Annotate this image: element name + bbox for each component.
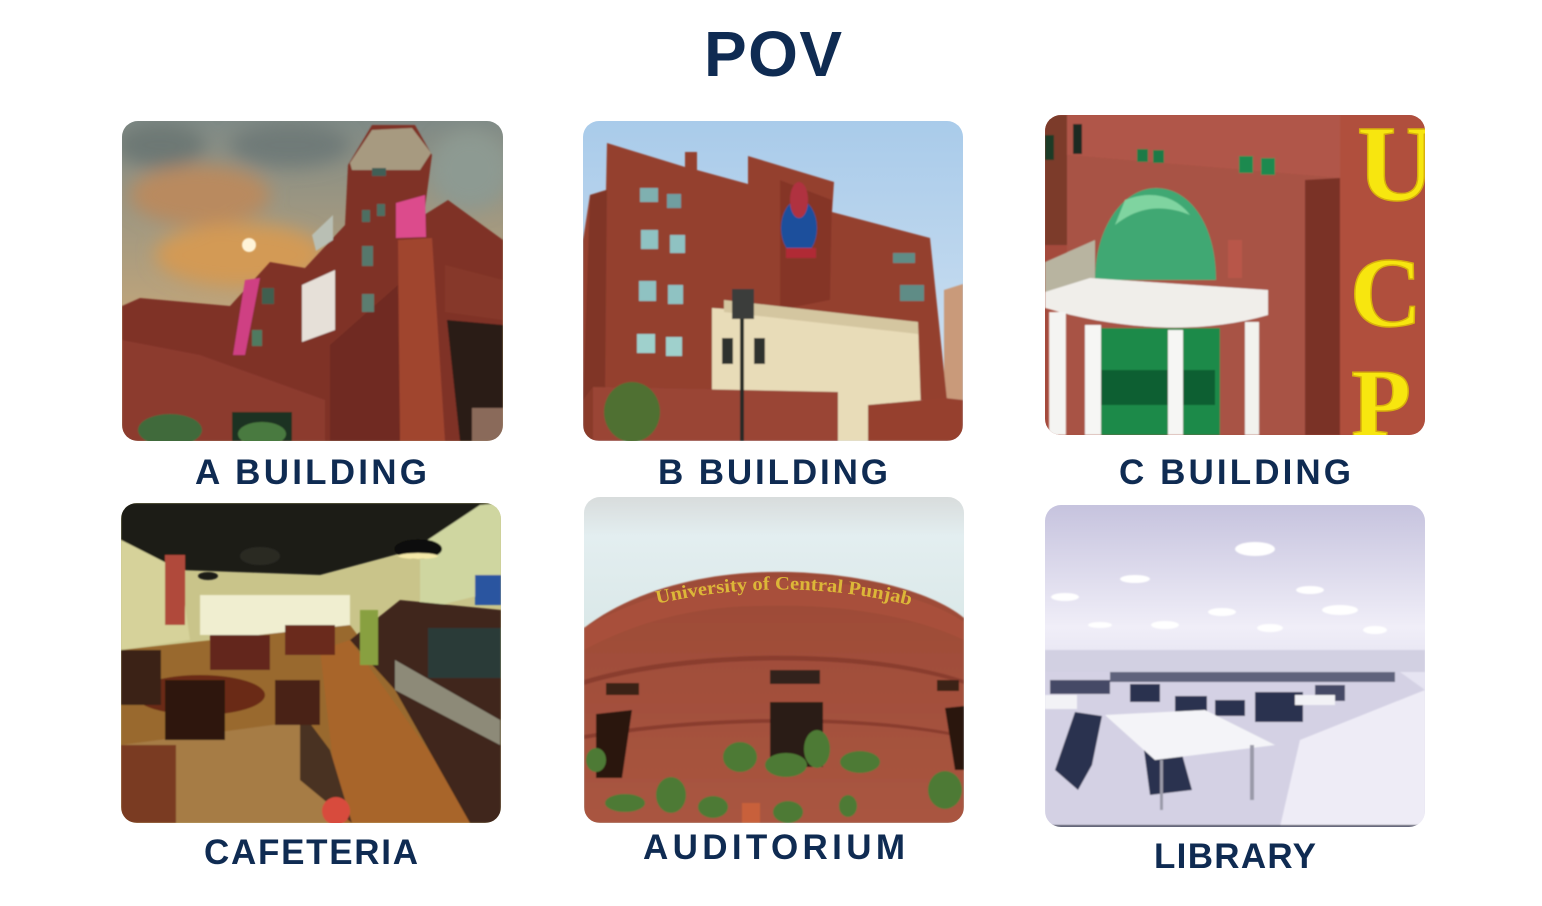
label: Library: LIBRARY [1154,837,1316,876]
label: Auditorium: AUDITORIUM [643,828,905,867]
building lettering: U C P [1352,128,1425,435]
label: A Building: A BUILDING [195,453,427,492]
building lettering: U C P: U [1357,105,1435,224]
photo: Auditorium [584,497,964,823]
label: C Building: C BUILDING [1119,453,1351,492]
building lettering: University of Central Punjab: University of Central Punjab [654,576,911,604]
photo: Cafeteria [121,503,501,825]
building lettering: U C P: P [1351,350,1411,458]
photo: B Building [583,121,963,442]
title: POV [704,18,842,90]
label: Cafeteria: CAFETERIA [204,833,418,872]
photo: C Building [1045,115,1425,435]
photo: A Building [115,121,510,446]
building lettering: U C P: C [1350,237,1422,348]
photo: Library [1045,505,1425,827]
label: B Building: B BUILDING [658,453,888,492]
